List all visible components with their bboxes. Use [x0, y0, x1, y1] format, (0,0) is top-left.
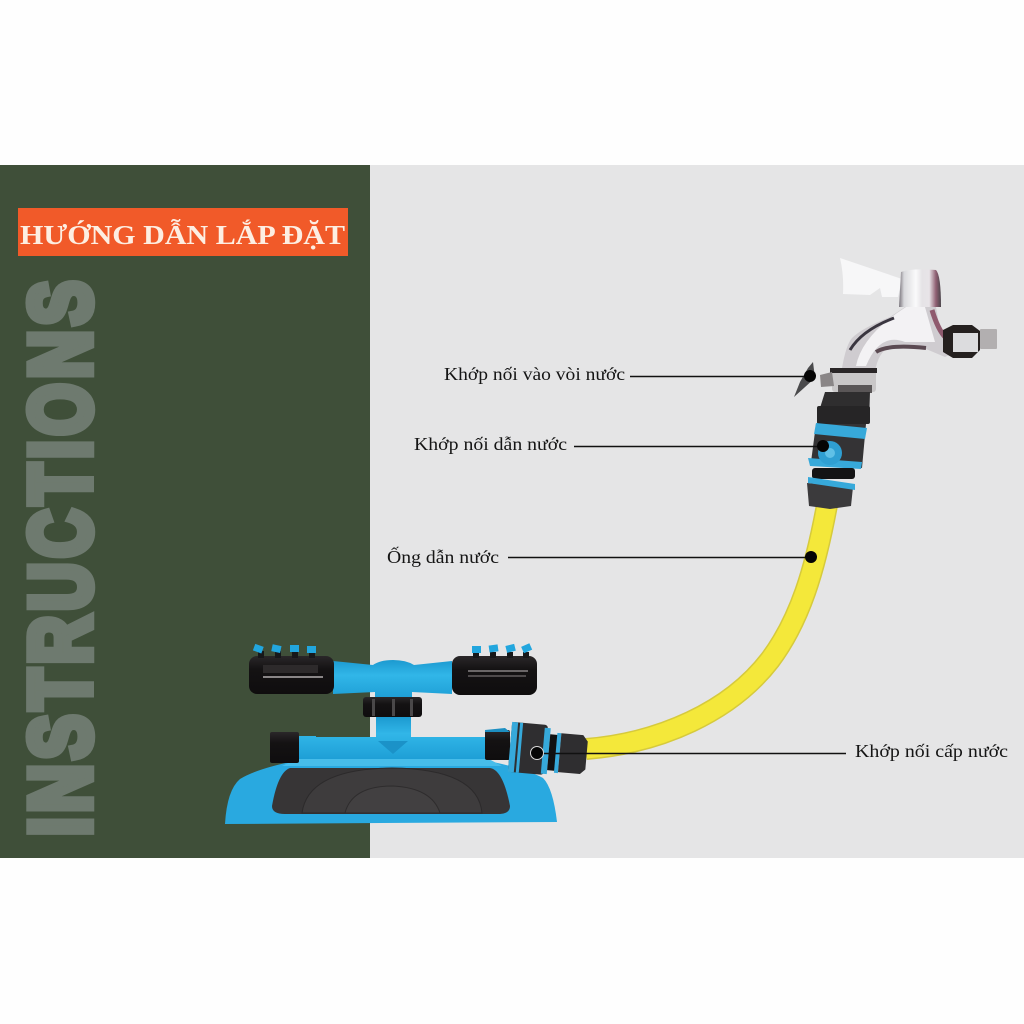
heading: orange banner — [18, 208, 348, 256]
panel: light gray right — [370, 165, 1024, 858]
callout: Khớp nối cấp nước: Khớp nối cấp nước — [855, 741, 1008, 761]
collar — [363, 697, 422, 717]
sprinkler — [225, 643, 589, 824]
upper blue arms — [333, 660, 452, 698]
callout: Khớp nối cấp nước — [530, 741, 1008, 761]
left black arm end — [249, 656, 334, 694]
callout: Ống dẫn nước: Ống dẫn nước — [387, 546, 499, 567]
upper black connector — [817, 392, 870, 424]
blue quick connector — [808, 423, 867, 469]
callout: Khớp nối dẫn nước: Khớp nối dẫn nước — [414, 434, 567, 454]
callout: Ống dẫn nước — [387, 546, 817, 567]
nozzles — [253, 643, 532, 658]
lower blue bar — [298, 717, 487, 759]
heading: orange banner: HƯỚNG DẪN LẮP ĐẶT — [20, 219, 345, 250]
faucet — [794, 258, 997, 509]
sprinkler base — [225, 760, 557, 824]
lower black connector — [807, 468, 855, 509]
callout: Khớp nối dẫn nước — [414, 434, 829, 454]
sprinkler base dark pad — [272, 768, 510, 814]
right black arm end — [452, 656, 537, 695]
faucet body — [842, 307, 955, 372]
yellow water hose — [586, 505, 827, 749]
vertical watermark: INSTRUCTIONS: INSTRUCTIONS — [13, 281, 109, 836]
faucet handle — [840, 258, 902, 297]
callout: Khớp nối vào vòi nước — [444, 364, 816, 384]
hose connector — [485, 722, 589, 778]
faucet outlet nut — [943, 325, 997, 358]
hose clamp — [794, 362, 877, 397]
callout: Khớp nối vào vòi nước: Khớp nối vào vòi nước — [444, 364, 625, 384]
left black nut — [270, 732, 299, 763]
panel: dark green left — [0, 165, 370, 858]
